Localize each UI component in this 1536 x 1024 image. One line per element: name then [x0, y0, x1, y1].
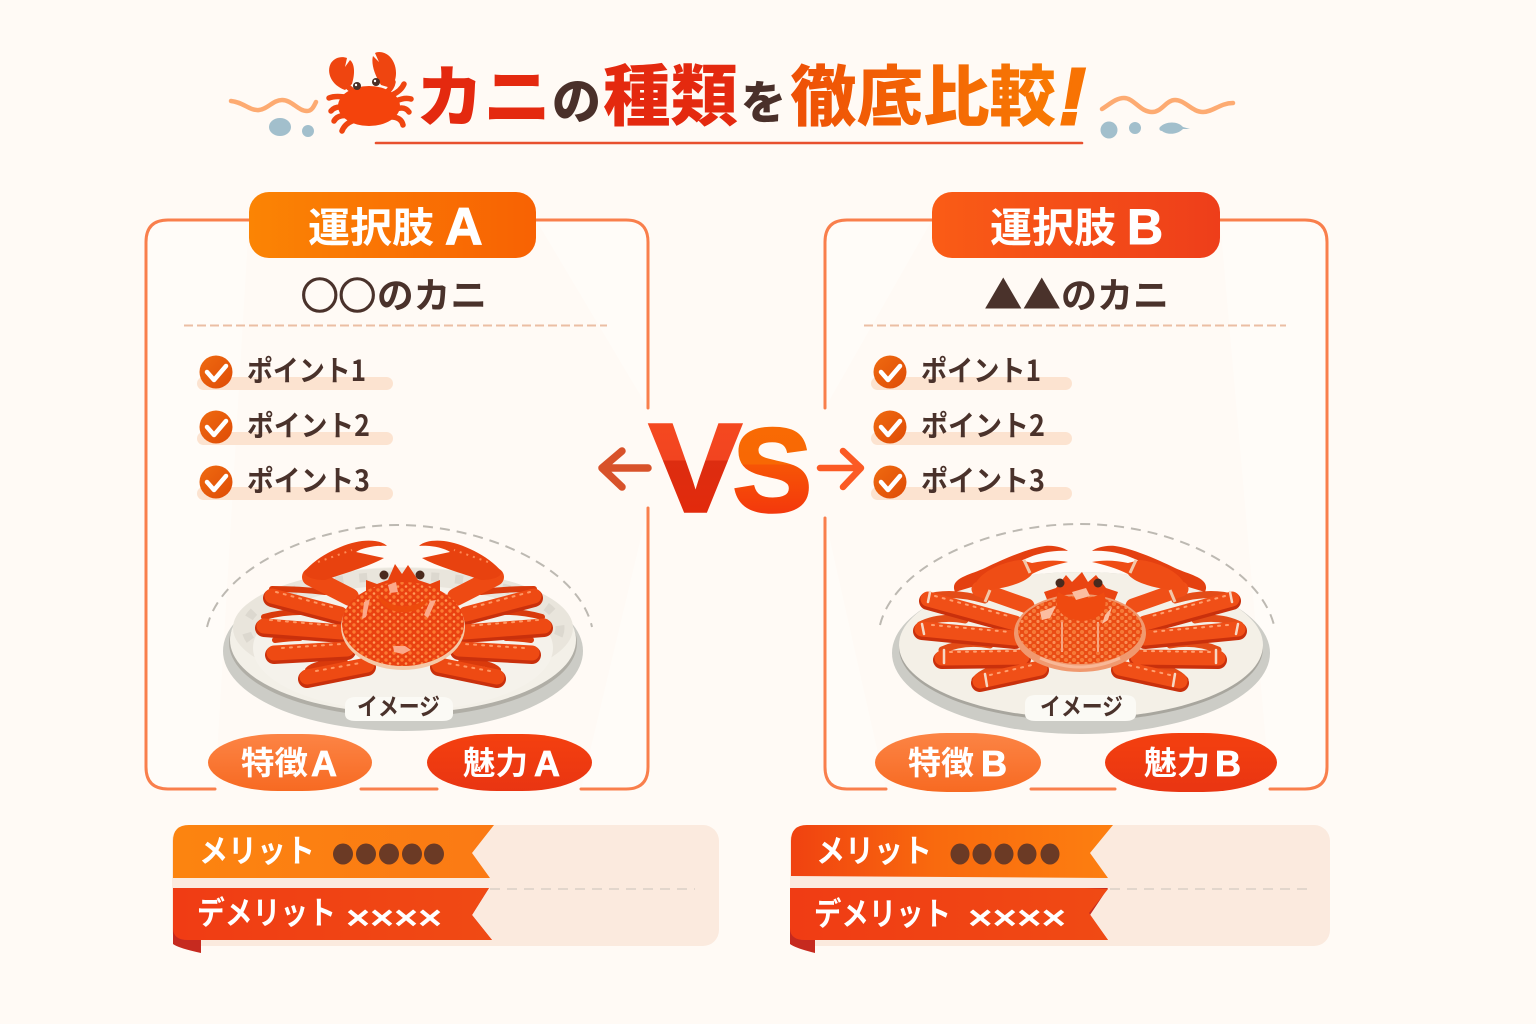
right claw: [1092, 546, 1206, 606]
arrow: right: [820, 451, 861, 487]
title banner: [231, 43, 1233, 143]
demerit ribbon B: ××××: [968, 899, 1066, 936]
VS text: [650, 398, 812, 538]
point 2: [197, 403, 393, 445]
title text: カニ: [416, 44, 551, 141]
badge: charm B: [1105, 733, 1277, 792]
point 3: ポイント3: [247, 458, 370, 500]
left claw: [954, 546, 1068, 606]
badge: feature B: [875, 733, 1041, 792]
demerit ribbon B: [790, 888, 1108, 953]
point 2: [871, 403, 1072, 445]
badge: feature B: B: [981, 743, 1007, 784]
title text: を: [741, 67, 786, 133]
panel: choice A: [146, 192, 648, 791]
icon: title crab: [329, 52, 411, 131]
checklist A: [197, 348, 393, 500]
title text: !: [1059, 52, 1086, 141]
heading: choice B: 運択肢: [990, 194, 1116, 254]
left legs: [264, 589, 367, 679]
point 1: ポイント1: [247, 348, 366, 390]
subtitle B: ▲▲: [984, 265, 1061, 320]
image label A: イメージ: [357, 687, 440, 722]
subtitle B: [984, 265, 1169, 320]
illustration: crab on plate B: [880, 524, 1274, 734]
point 1: ポイント1: [921, 348, 1041, 390]
point 3: [871, 458, 1072, 500]
point 3: [197, 458, 393, 500]
icon: right wave, bubbles and fish: [1100, 98, 1233, 138]
title underline: [376, 142, 1082, 144]
crab body: [341, 564, 465, 670]
heading: choice A: A: [445, 198, 483, 256]
demerit ribbon A: ××××: [346, 899, 442, 936]
subtitle B: のカニ: [1061, 267, 1169, 319]
VS text: S: [733, 405, 812, 537]
demerit ribbon A: [173, 888, 492, 953]
badge: charm B: B: [1215, 743, 1241, 784]
checklist B: [871, 348, 1072, 500]
point 3: ポイント3: [921, 458, 1045, 500]
title text: [416, 43, 1086, 141]
subtitle A: [301, 266, 487, 320]
merit ribbon B: [791, 825, 1113, 878]
panel frame A: [146, 220, 648, 789]
point 2: ポイント2: [247, 403, 370, 445]
panel: merits and demerits B: [790, 825, 1330, 953]
panel: merits and demerits A: [172, 825, 719, 953]
VS emblem: [602, 398, 861, 538]
subtitle A: ○○: [301, 266, 376, 320]
demerit ribbon A: デメリット: [197, 888, 336, 934]
illustration: crab on plate A: [207, 525, 592, 731]
heading: choice B: B: [1127, 199, 1163, 255]
icon: left wave and bubbles: [231, 100, 316, 137]
title text: 種類: [603, 43, 738, 140]
point 2: ポイント2: [921, 403, 1045, 445]
merit ribbon A: [173, 825, 494, 878]
badge: feature B: 特徴: [908, 738, 974, 784]
title text: 徹底比較: [790, 44, 1056, 140]
badge: charm A: 魅力: [463, 738, 528, 784]
left legs: [920, 592, 1040, 686]
arrow: left: [602, 451, 648, 487]
badge: feature A: 特徴: [241, 738, 308, 784]
heading: choice A: [249, 192, 536, 258]
crab body: [1014, 572, 1146, 672]
badge: charm A: A: [534, 743, 560, 784]
merit ribbon B: メリット: [816, 826, 932, 872]
heading: choice A: 運択肢: [308, 194, 434, 254]
badge: feature A: [208, 734, 372, 791]
claws: [304, 541, 502, 597]
point 1: [197, 348, 393, 390]
badge: charm A: [427, 734, 592, 791]
point 1: [871, 348, 1072, 390]
image label B: イメージ: [1040, 687, 1123, 722]
demerit ribbon B: デメリット: [814, 889, 951, 935]
right legs: [1120, 592, 1240, 686]
right legs: [439, 589, 544, 679]
heading: choice B: [932, 192, 1220, 258]
badge: feature A: A: [311, 743, 337, 784]
merit ribbon A: メリット: [199, 826, 315, 872]
VS text: V: [650, 398, 741, 538]
panel: choice B: [825, 192, 1327, 792]
panel frame B: [825, 220, 1327, 789]
title text: の: [552, 62, 601, 134]
subtitle A: のカニ: [377, 267, 487, 319]
badge: charm B: 魅力: [1144, 738, 1210, 784]
